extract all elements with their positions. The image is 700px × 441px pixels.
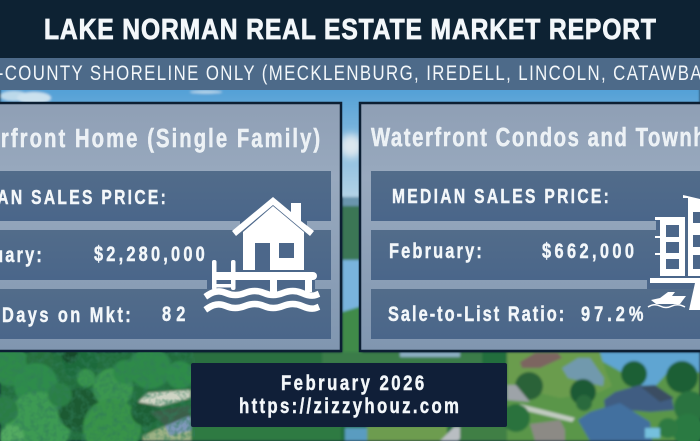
row: median sales price: MEDIAN SALES PRICE: — [392, 185, 609, 207]
footer box — [191, 363, 507, 427]
cloud — [339, 134, 363, 158]
subtitle band — [0, 58, 700, 90]
row: days on market: Days on Mkt: — [2, 303, 131, 326]
icon: waterfront house — [207, 197, 317, 309]
row: median sales price — [371, 171, 700, 221]
row: february price — [0, 230, 331, 280]
row: sale-to-list ratio: 97.2% — [581, 302, 644, 325]
subtitle: 4-COUNTY SHORELINE ONLY (MECKLENBURG, IREDELL, LINCOLN, CATAWBA) — [0, 62, 700, 86]
icon: condo building and boat — [647, 195, 700, 310]
title: LAKE NORMAN REAL ESTATE MARKET REPORT — [44, 13, 657, 45]
row: median sales price — [0, 171, 331, 221]
row: sale-to-list ratio — [371, 289, 700, 339]
row: days on market — [0, 289, 331, 339]
panel: waterfront home — [0, 103, 341, 351]
panel: waterfront condos — [360, 103, 700, 351]
row: days on market: 82 — [162, 302, 185, 325]
row: sale-to-list ratio: Sale-to-List Ratio: — [388, 302, 564, 325]
title band — [0, 0, 700, 58]
row: february price: $2,280,000 — [94, 242, 205, 265]
row: february price: February: — [389, 239, 482, 262]
date: February 2026 — [281, 372, 424, 396]
row: february price: $662,000 — [542, 239, 634, 262]
website: https://zizzyhouz.com — [239, 395, 459, 419]
foliage texture — [0, 352, 195, 441]
row: february price — [371, 230, 700, 280]
